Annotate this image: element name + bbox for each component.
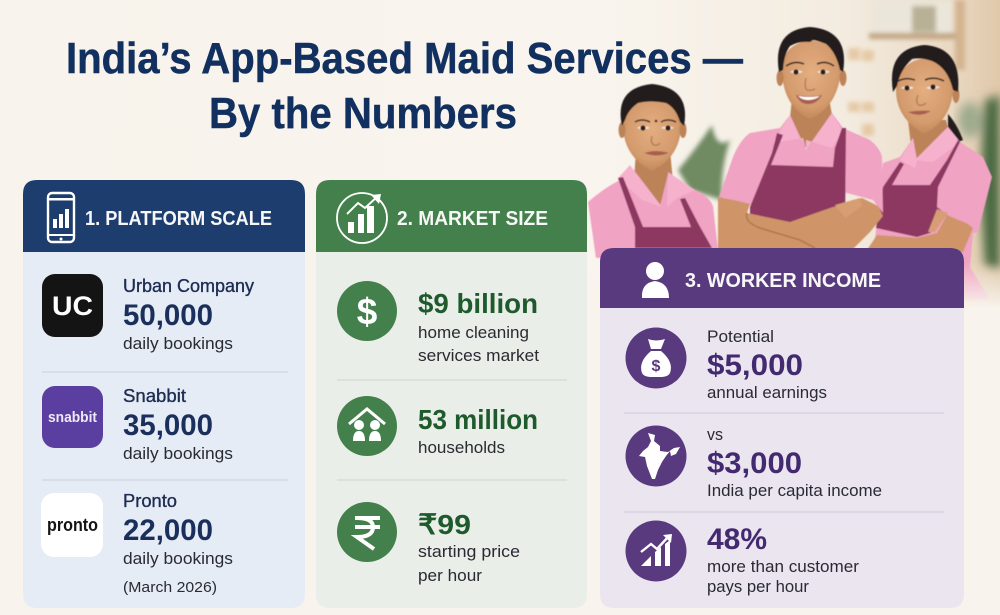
row: potential earnings: annual earnings	[707, 384, 827, 402]
heading: 2. MARKET SIZE	[397, 207, 548, 230]
background	[0, 0, 1000, 320]
icon: rising chart	[626, 520, 686, 582]
panel header	[600, 248, 964, 308]
row: Snabbit	[42, 386, 233, 463]
title: India’s App-Based Maid Services —	[66, 34, 743, 83]
row: hourly premium: pays per hour	[707, 578, 809, 596]
icon: smartphone with bars	[48, 193, 74, 242]
photo fade into page background	[590, 262, 1000, 308]
row: potential earnings: Potential	[707, 328, 774, 346]
row: hourly premium: more than customer	[707, 558, 860, 576]
row: Pronto: 22,000	[123, 514, 213, 547]
row: Pronto: Pronto	[123, 491, 177, 511]
title: By the Numbers	[209, 89, 517, 138]
icon: rupee	[337, 502, 397, 562]
row: per capita comparison	[626, 426, 882, 500]
panel: market size	[316, 180, 587, 608]
row: Pronto: daily bookings	[123, 550, 233, 568]
row: market value: services market	[418, 347, 539, 365]
row: hourly premium: 48%	[707, 523, 767, 556]
worker right	[867, 45, 992, 300]
row: per capita comparison: India per capita income	[707, 482, 882, 500]
row: Snabbit: 35,000	[123, 409, 213, 442]
photo: three smiling workers in pink uniforms	[588, 27, 992, 300]
row: starting price: per hour	[418, 567, 483, 585]
row: Pronto	[41, 491, 233, 596]
row: Urban Company: 50,000	[123, 299, 213, 332]
row: market value	[337, 281, 539, 365]
panel header	[316, 180, 587, 252]
row: Pronto: (March 2026)	[123, 579, 217, 596]
icon: India map	[626, 426, 686, 486]
row: Urban Company: UC	[52, 291, 93, 321]
row: potential earnings: $5,000	[707, 349, 803, 382]
panel: platform scale	[23, 180, 305, 608]
row: Urban Company: Urban Company	[123, 276, 254, 296]
row: starting price: starting price	[418, 543, 520, 561]
heading: 1. PLATFORM SCALE	[85, 207, 272, 230]
row: Snabbit: Snabbit	[123, 386, 186, 406]
icon: person	[642, 262, 669, 298]
row: hourly premium	[626, 520, 860, 596]
icon: money bag: $	[652, 358, 661, 375]
row: households	[337, 396, 538, 457]
row: Urban Company	[42, 274, 254, 353]
panel header	[23, 180, 305, 252]
icon: dollar	[337, 281, 397, 341]
row: market value: home cleaning	[418, 324, 529, 342]
row: households: 53 million	[418, 404, 538, 435]
icon: house with people	[337, 396, 397, 456]
worker centre	[718, 27, 883, 250]
row: Pronto: pronto	[47, 515, 98, 535]
row: starting price	[337, 502, 520, 585]
title	[66, 34, 743, 138]
icon: dollar: $	[357, 291, 378, 332]
icon: money bag	[626, 328, 686, 388]
row: Urban Company: daily bookings	[123, 335, 233, 353]
row: households: households	[418, 439, 505, 457]
icon: growth chart in circle	[337, 193, 387, 243]
row: Snabbit: daily bookings	[123, 445, 233, 463]
row: starting price: ₹99	[418, 509, 471, 540]
row: market value: $9 billion	[418, 288, 538, 319]
row: potential earnings	[626, 328, 827, 402]
row: per capita comparison: vs	[707, 426, 723, 444]
row: per capita comparison: $3,000	[707, 447, 802, 480]
worker left	[588, 84, 718, 258]
row: Snabbit: snabbit	[48, 409, 97, 426]
panel: worker income	[600, 248, 964, 608]
heading: 3. WORKER INCOME	[685, 269, 881, 292]
